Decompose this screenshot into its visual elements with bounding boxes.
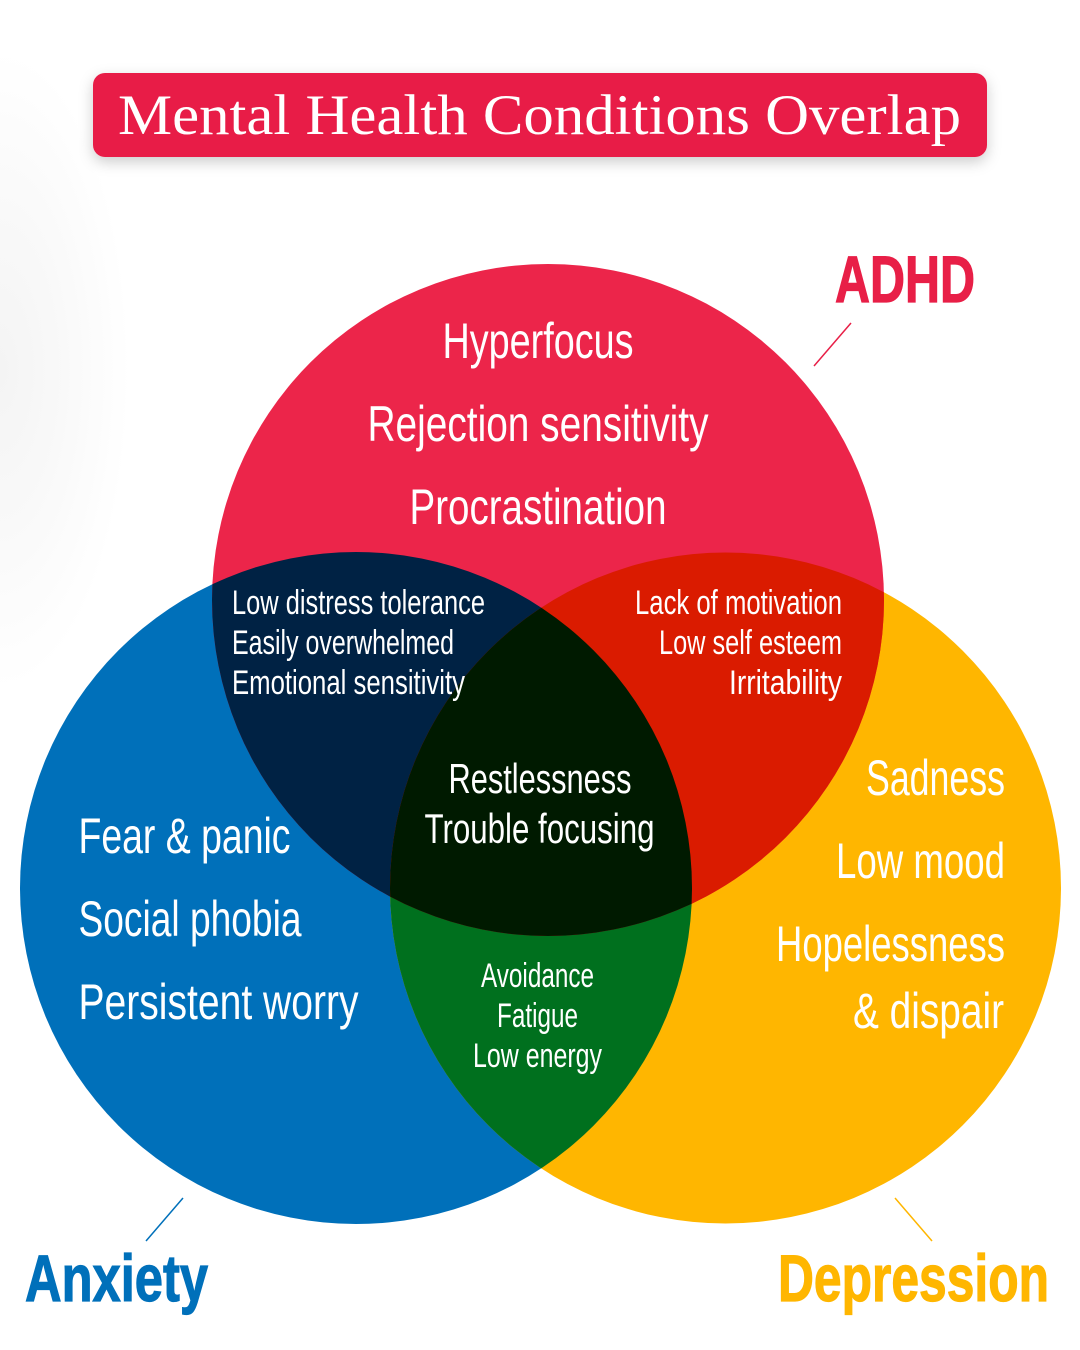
overlap: ADHD and Depression [390,552,884,936]
text: shared by all three: Restlessness [448,755,632,802]
title banner: Mental Health Conditions Overlap [118,84,961,147]
text: ADHD and Depression overlap [635,584,842,702]
text: Anxiety traits: Persistent worry [78,974,358,1030]
text: ADHD and Anxiety overlap [232,584,485,702]
overlap: Anxiety and Depression [390,896,692,1168]
text: Anxiety and Depression overlap: Avoidance [481,957,594,995]
text: ADHD and Anxiety overlap: Low distress tolerance [232,584,485,622]
text: Anxiety and Depression overlap [473,957,602,1075]
text: ADHD traits: Hyperfocus [442,313,634,369]
text: Depression traits [776,750,1005,1039]
text: ADHD traits [368,313,708,535]
overlap: ADHD and Anxiety [212,552,692,936]
text: Anxiety traits: Social phobia [78,891,302,947]
label: ADHD: ADHD [835,242,975,316]
circle: ADHD [212,264,884,936]
text: shared by all three [424,755,654,852]
text: Anxiety and Depression overlap: Fatigue [497,997,578,1035]
overlap: all three [390,608,692,936]
text: Anxiety and Depression overlap: Low energy [473,1037,602,1075]
pointer: ADHD [814,323,851,366]
text: Anxiety traits [78,808,358,1030]
text: ADHD and Depression overlap: Low self esteem [659,624,842,662]
text: ADHD and Anxiety overlap: Emotional sensitivity [232,664,465,702]
text: Depression traits: Low mood [836,833,1005,889]
title banner [93,73,987,157]
text: Depression traits: Sadness [866,750,1005,806]
text: Anxiety traits: Fear & panic [78,808,290,864]
pointer: Anxiety [146,1198,183,1241]
text: ADHD traits: Procrastination [410,479,666,535]
pointer: Depression [895,1198,932,1241]
circle: Depression [390,552,1061,1224]
text: ADHD traits: Rejection sensitivity [368,396,708,452]
text: ADHD and Depression overlap: Lack of motivation [635,584,842,622]
text: Depression traits: & dispair [853,983,1004,1039]
label: Anxiety: Anxiety [25,1241,208,1315]
text: ADHD and Depression overlap: Irritability [729,664,842,702]
text: ADHD and Anxiety overlap: Easily overwhelmed [232,624,454,662]
circle: Anxiety [20,552,692,1224]
text: shared by all three: Trouble focusing [424,805,654,852]
